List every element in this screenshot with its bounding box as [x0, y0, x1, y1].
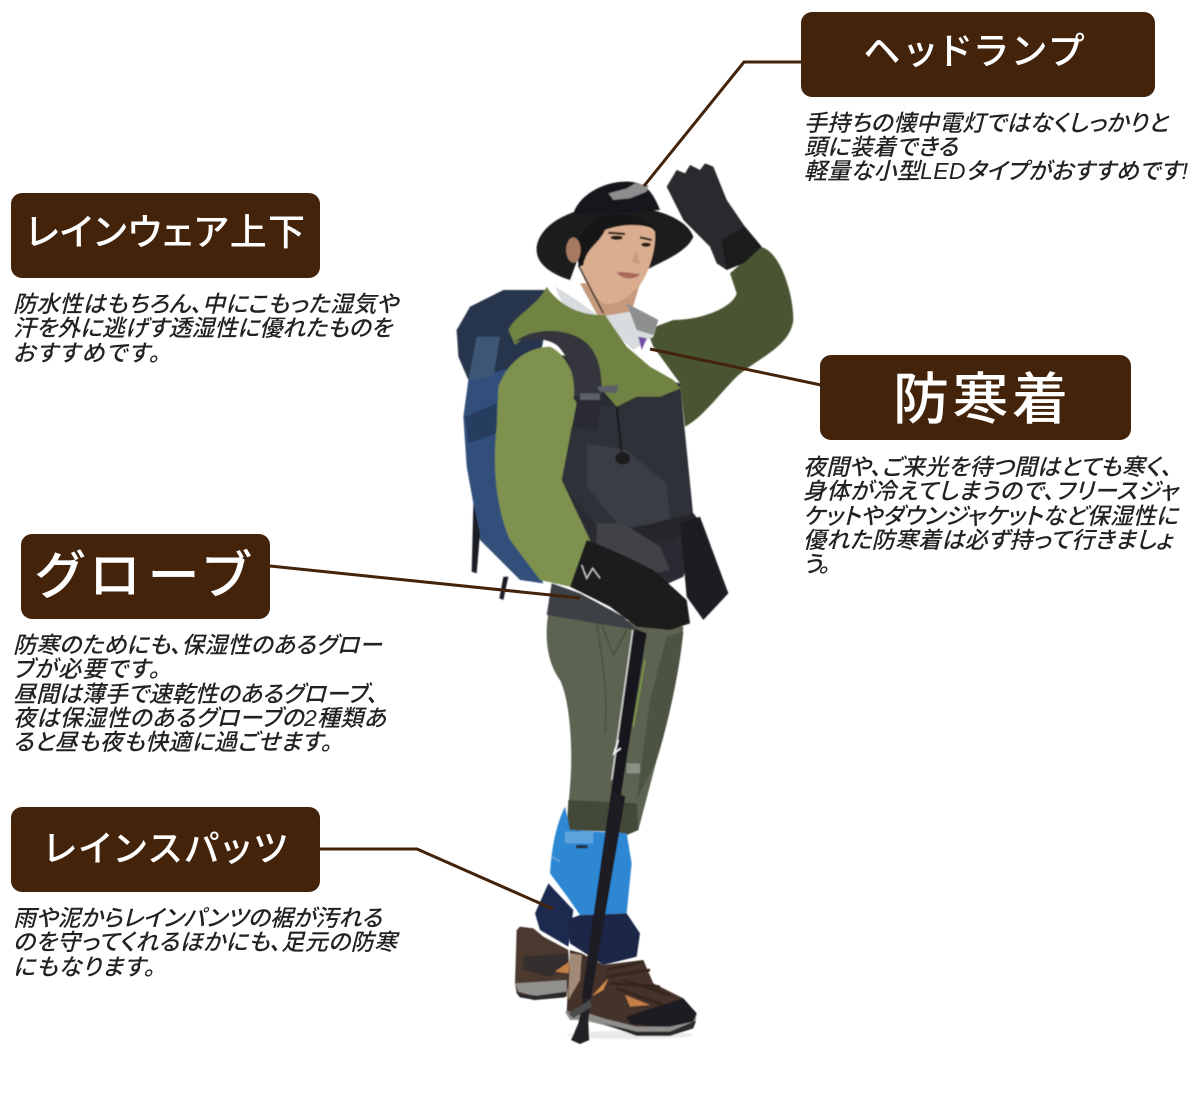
left arm sleeve	[495, 347, 590, 587]
blue gaiter	[550, 807, 632, 915]
description	[13, 291, 401, 366]
description: 防水性はもちろん、中にこもった湿気や	[13, 291, 401, 317]
description: 雨や泥からレインパンツの裾が汚れる	[13, 905, 383, 931]
front boot	[565, 950, 697, 1036]
callout: rainwear	[11, 193, 401, 366]
description: ると昼も夜も快適に過ごせます。	[13, 729, 332, 755]
waist strap	[627, 513, 702, 540]
description: ケットやダウンジャケットなど保湿性に	[803, 503, 1181, 529]
description: 汗を外に逃げす透湿性に優れたものを	[13, 315, 393, 341]
upper body	[457, 163, 793, 630]
description: ブが必要です。	[13, 656, 160, 682]
headlamp	[608, 183, 648, 200]
description: 身体が冷えてしまうので、フリースジャ	[803, 478, 1180, 504]
chest shading	[587, 443, 670, 527]
gripping glove	[570, 540, 690, 630]
figure: hiker with full gear	[457, 163, 793, 1044]
heading box: 防寒着	[893, 355, 1068, 436]
navy rain pants cuffs	[535, 883, 640, 965]
backpack	[457, 290, 550, 600]
description: 軽量な小型LEDタイプがおすすめです!	[804, 158, 1189, 184]
ground shadow	[567, 1031, 693, 1039]
hanging pouch	[680, 517, 728, 620]
heading box	[820, 355, 1131, 440]
heading box: ヘッドランプ	[863, 21, 1085, 75]
collar	[555, 287, 658, 350]
trekking poles	[568, 628, 647, 1044]
description	[13, 632, 387, 755]
description: 優れた防寒着は必ず持って行きましょ	[803, 527, 1174, 553]
hood and yoke	[508, 287, 681, 407]
description	[803, 454, 1181, 577]
torso underlay	[540, 350, 700, 590]
leader line to gaiter	[320, 849, 553, 909]
face	[566, 215, 657, 313]
description	[13, 905, 400, 980]
rear boot	[515, 927, 569, 1000]
description: 昼間は薄手で速乾性のあるグローブ、	[13, 681, 378, 707]
description: にもなります。	[13, 954, 155, 980]
heading box: レインウェア上下	[26, 202, 305, 256]
description: おすすめです。	[13, 340, 160, 366]
leader line to jacket	[650, 349, 821, 385]
raised glove	[667, 163, 762, 270]
description: 夜は保湿性のあるグローブの2種類あ	[13, 705, 387, 731]
callout: rain spats	[11, 807, 553, 980]
neck	[580, 283, 640, 320]
callout: cold protection	[650, 349, 1181, 577]
description: 頭に装着できる	[804, 134, 959, 160]
description: 夜間や、ご来光を待つ間はとても寒く、	[803, 454, 1172, 480]
pole grips	[597, 523, 670, 573]
right arm dark sleeve	[647, 247, 793, 427]
callout: gloves	[13, 534, 580, 755]
heading box: グローブ	[35, 534, 251, 609]
torso dark panel	[560, 388, 700, 540]
description: 手持ちの懐中電灯ではなくしっかりと	[804, 110, 1170, 136]
callout: headlamp	[644, 12, 1189, 186]
description	[804, 110, 1189, 184]
heading box	[11, 193, 320, 278]
trousers	[547, 613, 683, 835]
heading box: レインスパッツ	[44, 820, 287, 872]
heading box	[11, 807, 320, 892]
hip belt	[547, 583, 637, 630]
description: う。	[803, 551, 830, 577]
legs, gaiters, boots and poles	[515, 613, 697, 1044]
description: 防寒のためにも、保湿性のあるグロー	[13, 632, 383, 658]
heading box	[801, 12, 1155, 97]
leader line to glove	[270, 566, 580, 598]
leader line to headlamp	[644, 62, 802, 186]
pack strap	[515, 331, 603, 400]
description: のを守ってくれるほかにも、足元の防寒	[13, 929, 400, 955]
hat	[537, 182, 693, 280]
